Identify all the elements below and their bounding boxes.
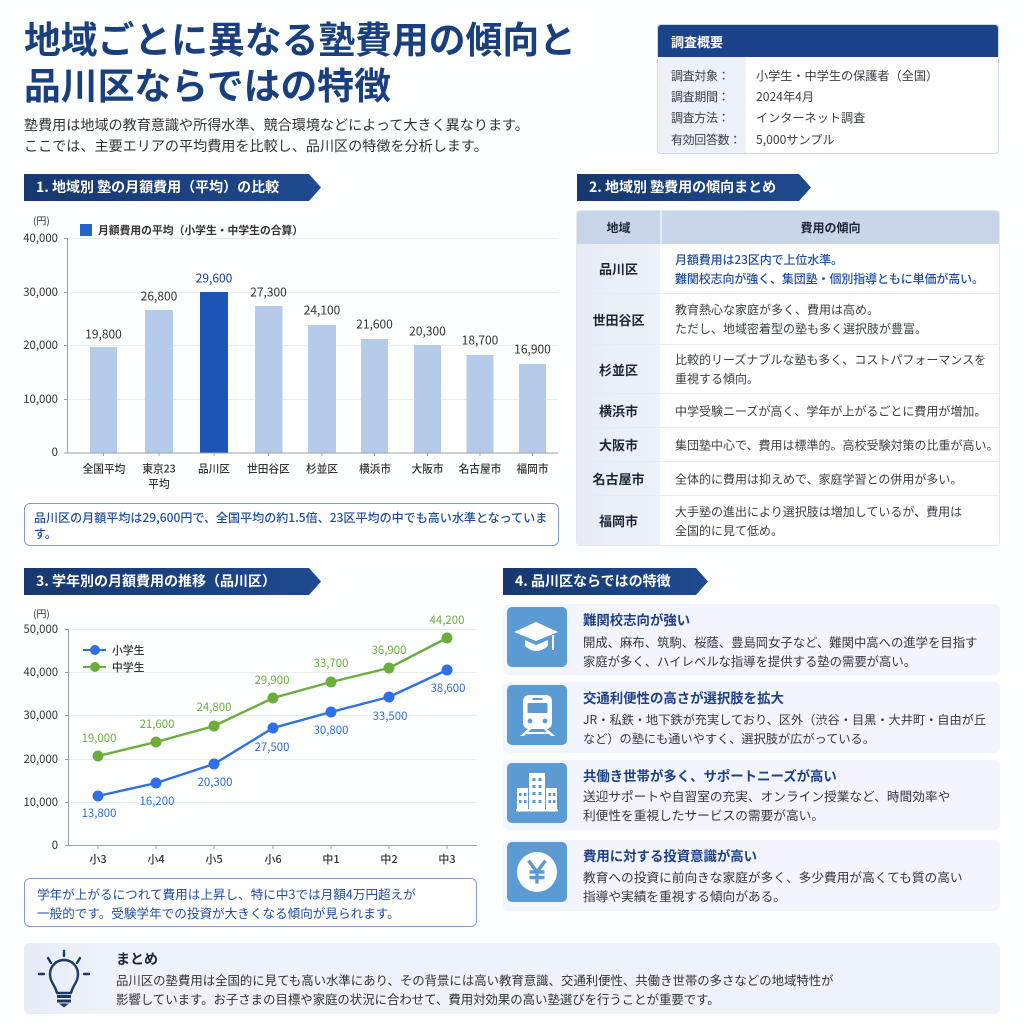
line chart: 19,000 bbox=[82, 730, 116, 746]
row: 名古屋市 bbox=[577, 462, 999, 496]
bar chart: 杉並区 bbox=[306, 462, 338, 476]
line chart: 40,000 bbox=[24, 664, 58, 680]
row: 福岡市: 福岡市 bbox=[599, 511, 638, 530]
bar chart: 横浜市 bbox=[359, 462, 391, 476]
row: 杉並区 bbox=[577, 345, 999, 394]
line chart: 13,800 bbox=[82, 805, 116, 821]
feature body: 指導や実績を重視する傾向がある。 bbox=[583, 886, 786, 905]
callout: line chart note: 一般的です。受験学年での投資が大きくなる傾向が見られます。 bbox=[37, 903, 400, 922]
row: 世田谷区: 世田谷区 bbox=[592, 310, 644, 328]
intro text: 塾費用は地域の教育意識や所得水準、競合環境などによって大きく異なります。 bbox=[24, 115, 529, 135]
survey header: 調査概要 bbox=[671, 32, 723, 51]
line chart: 小学生 bbox=[112, 642, 145, 658]
heading: section 3: 3. 学年別の月額費用の推移（品川区） bbox=[36, 571, 276, 591]
panel: feature 1 bbox=[503, 604, 1000, 675]
heading: section 3 bbox=[24, 568, 321, 595]
bar chart: 世田谷区 bbox=[247, 462, 290, 476]
bar chart: 20,300 bbox=[409, 322, 446, 340]
panel: feature 4 bbox=[503, 840, 1000, 911]
row: 名古屋市: 名古屋市 bbox=[592, 469, 644, 488]
heading: section 2: 2. 地域別 塾費用の傾向まとめ bbox=[589, 177, 776, 197]
line chart: 中2 bbox=[380, 851, 398, 867]
survey label column: 調査対象： bbox=[671, 66, 729, 84]
feature title: 難関校志向が強い bbox=[583, 609, 690, 629]
bar chart: 30,000 bbox=[23, 284, 58, 300]
bar chart: 福岡市 bbox=[516, 462, 549, 476]
table header: 費用の傾向 bbox=[800, 219, 860, 236]
line chart: 0 bbox=[52, 837, 58, 853]
row: 福岡市: 大手塾の進出により選択肢は増加しているが、費用は bbox=[675, 502, 962, 520]
bar chart: 24,100 bbox=[304, 302, 341, 318]
line chart: 小5 bbox=[205, 851, 223, 867]
icon: light bulb bbox=[38, 950, 90, 1008]
row: 杉並区: 杉並区 bbox=[599, 360, 638, 378]
table header bbox=[577, 211, 999, 244]
bar chart: 品川区 bbox=[198, 462, 230, 476]
row: 福岡市 bbox=[577, 496, 962, 545]
table header: 地域 bbox=[606, 219, 630, 236]
line chart: 29,900 bbox=[255, 672, 289, 688]
survey values bbox=[756, 66, 938, 148]
feature title: 費用に対する投資意識が高い bbox=[583, 845, 757, 865]
row: 福岡市: 全国的に見て低め。 bbox=[675, 522, 783, 538]
bar chart: 26,800 bbox=[141, 288, 178, 304]
icon: yen coin bbox=[507, 842, 567, 902]
bar chart: (円) bbox=[33, 212, 50, 228]
bar chart: 40,000 bbox=[23, 230, 58, 246]
icon: graduation cap bbox=[507, 607, 567, 667]
survey label column: 調査期間： bbox=[671, 88, 729, 105]
survey values: 2024年4月 bbox=[756, 88, 814, 105]
callout: bar chart note: 品川区の月額平均は29,600円で、全国平均の約1.5倍、23区平均の中でも高い水準となっていま bbox=[34, 509, 547, 526]
bar chart: 大阪市 bbox=[411, 462, 444, 476]
summary body: 品川区の塾費用は全国的に見ても高い水準にあり、その背景には高い教育意識、交通利便性、共働き世帯の多さなどの地域特性が bbox=[116, 971, 834, 989]
line chart: 27,500 bbox=[255, 739, 289, 755]
line chart: 30,000 bbox=[24, 707, 58, 723]
survey header bbox=[658, 25, 1000, 57]
line chart: 38,600 bbox=[431, 680, 465, 696]
bar chart: 東京23 bbox=[142, 462, 176, 476]
row: 名古屋市: 全体的に費用は抑えめで、家庭学習との併用が多い。 bbox=[675, 470, 962, 487]
survey label column bbox=[658, 57, 746, 155]
row: 世田谷区: ただし、地域密着型の塾も多く選択肢が豊富。 bbox=[675, 320, 927, 337]
line chart: 20,000 bbox=[24, 751, 58, 767]
feature body bbox=[583, 633, 977, 670]
icon: buildings bbox=[507, 763, 567, 823]
heading: section 1 bbox=[24, 174, 321, 201]
survey label column: 調査方法： bbox=[671, 109, 729, 126]
heading: section 4 bbox=[503, 568, 708, 595]
survey values: 5,000サンプル bbox=[756, 131, 835, 148]
line chart: 小3 bbox=[89, 851, 107, 867]
line chart: 20,300 bbox=[198, 774, 232, 790]
bar chart: 29,600 bbox=[196, 270, 233, 286]
row: 杉並区: 比較的リーズナブルな塾も多く、コストパフォーマンスを bbox=[675, 351, 986, 368]
survey values: 小学生・中学生の保護者（全国） bbox=[756, 66, 938, 84]
line chart bbox=[24, 606, 477, 867]
row: 品川区: 月額費用は23区内で上位水準。 bbox=[675, 250, 843, 268]
bar chart: 月額費用の平均（小学生・中学生の合算） bbox=[98, 222, 303, 238]
feature body: 開成、麻布、筑駒、桜蔭、豊島岡女子など、難関中高への進学を目指す bbox=[583, 633, 977, 651]
line chart: 10,000 bbox=[24, 794, 58, 810]
summary body bbox=[116, 971, 834, 1008]
bar chart: 0 bbox=[52, 444, 58, 460]
bar chart: 平均 bbox=[148, 476, 170, 492]
heading: section 4: 4. 品川区ならではの特徴 bbox=[515, 571, 671, 591]
line chart: 33,700 bbox=[314, 655, 348, 671]
line chart: (円) bbox=[33, 606, 50, 620]
row: 大阪市: 集団塾中心で、費用は標準的。高校受験対策の比重が高い。 bbox=[675, 436, 999, 453]
bar chart: 27,300 bbox=[250, 284, 287, 300]
bar chart bbox=[23, 212, 558, 492]
row: 横浜市: 横浜市 bbox=[599, 401, 638, 420]
row: 品川区: 品川区 bbox=[599, 259, 638, 278]
row: 品川区 bbox=[577, 244, 999, 294]
feature body: JR・私鉄・地下鉄が充実しており、区外（渋谷・目黒・大井町・自由が丘 bbox=[583, 710, 986, 728]
callout: bar chart note: す。 bbox=[34, 524, 57, 542]
feature body: 送迎サポートや自習室の充実、オンライン授業など、時間効率や bbox=[583, 786, 950, 805]
feature body bbox=[583, 710, 986, 747]
line chart: 44,200 bbox=[430, 612, 464, 628]
heading: section 1: 1. 地域別 塾の月額費用（平均）の比較 bbox=[36, 177, 279, 197]
feature title: 共働き世帯が多く、サポートニーズが高い bbox=[583, 765, 837, 785]
title: 品川区ならではの特徴 bbox=[24, 56, 391, 110]
callout: bar chart note bbox=[24, 503, 559, 546]
line chart: 中1 bbox=[322, 851, 340, 867]
row: 横浜市: 中学受験ニーズが高く、学年が上がるごとに費用が増加。 bbox=[675, 402, 986, 419]
title bbox=[24, 10, 576, 110]
line chart: 33,500 bbox=[373, 708, 407, 724]
line chart: 30,800 bbox=[314, 722, 348, 738]
bar chart: 20,000 bbox=[23, 337, 58, 353]
row: 品川区: 難関校志向が強く、集団塾・個別指導ともに単価が高い。 bbox=[675, 270, 984, 286]
intro text bbox=[24, 115, 529, 156]
bar chart: 18,700 bbox=[462, 332, 499, 348]
bar chart: 21,600 bbox=[356, 316, 393, 332]
line chart: 小6 bbox=[264, 851, 282, 867]
panel: summary bbox=[24, 943, 1000, 1014]
summary title: まとめ bbox=[116, 949, 158, 969]
panel: feature 2 bbox=[503, 682, 1000, 753]
bar chart: 名古屋市 bbox=[459, 462, 502, 476]
row: 世田谷区 bbox=[577, 294, 999, 345]
row: 大阪市 bbox=[577, 428, 999, 462]
panel: survey overview bbox=[657, 24, 999, 154]
line chart: 24,800 bbox=[197, 699, 231, 715]
row: 杉並区: 重視する傾向。 bbox=[675, 370, 759, 387]
bar chart: 16,900 bbox=[514, 340, 551, 358]
panel: feature 3 bbox=[503, 760, 1000, 830]
heading: section 2 bbox=[577, 174, 811, 201]
line chart: 50,000 bbox=[24, 621, 58, 637]
bar chart: 19,800 bbox=[85, 326, 122, 342]
summary body: 影響しています。お子さまの目標や家庭の状況に合わせて、費用対効果の高い塾選びを行うことが重要です。 bbox=[116, 990, 720, 1008]
bar chart: 10,000 bbox=[23, 391, 58, 407]
row: 横浜市 bbox=[577, 394, 999, 428]
panel: trend table bbox=[577, 211, 999, 545]
feature body: など）の塾にも通いやすく、選択肢が広がっている。 bbox=[583, 729, 875, 747]
line chart: 中学生 bbox=[112, 659, 145, 675]
callout: line chart note: 学年が上がるにつれて費用は上昇し、特に中3では月額4万円超えが bbox=[37, 884, 416, 903]
title: 地域ごとに異なる塾費用の傾向と bbox=[24, 10, 576, 64]
survey values: インターネット調査 bbox=[756, 109, 865, 126]
callout: line chart note bbox=[24, 878, 477, 927]
feature body: 教育への投資に前向きな家庭が多く、多少費用が高くても質の高い bbox=[583, 867, 963, 886]
line chart: 中3 bbox=[438, 851, 456, 867]
bar chart: 全国平均 bbox=[83, 462, 126, 476]
feature body: 利便性を重視したサービスの需要が高い。 bbox=[583, 805, 824, 824]
row: 世田谷区: 教育熱心な家庭が多く、費用は高め。 bbox=[675, 301, 879, 318]
feature body bbox=[583, 786, 950, 824]
line chart: 36,900 bbox=[372, 642, 406, 658]
feature title: 交通利便性の高さが選択肢を拡大 bbox=[583, 687, 784, 707]
line chart: 21,600 bbox=[140, 716, 174, 732]
line chart: 16,200 bbox=[140, 793, 174, 809]
line chart: 小4 bbox=[147, 851, 165, 867]
intro text: ここでは、主要エリアの平均費用を比較し、品川区の特徴を分析します。 bbox=[24, 136, 488, 156]
survey label column: 有効回答数： bbox=[671, 131, 741, 148]
icon: train bbox=[507, 685, 567, 745]
row: 大阪市: 大阪市 bbox=[599, 435, 638, 454]
feature body bbox=[583, 867, 963, 905]
feature body: 家庭が多く、ハイレベルな指導を提供する塾の需要が高い。 bbox=[583, 652, 916, 670]
